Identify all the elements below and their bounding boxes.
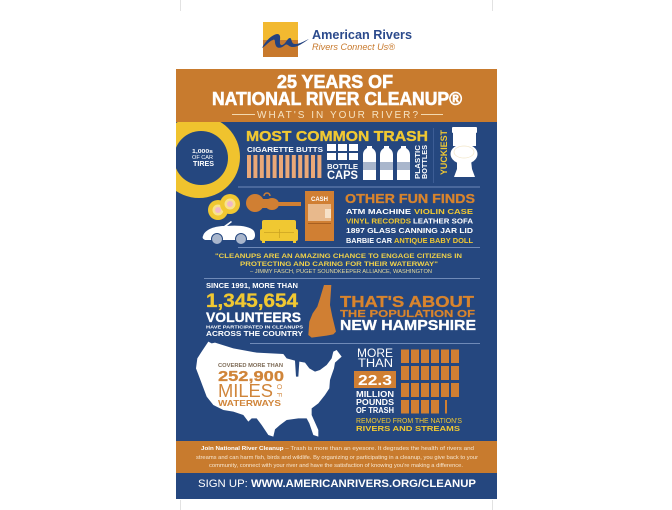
icon: violin case xyxy=(246,193,301,212)
comparison: New Hampshire: NEW HAMPSHIRE xyxy=(340,318,476,334)
logo: American Rivers xyxy=(262,22,412,57)
volunteers statistic: HAVE PARTICIPATED IN CLEANUPS xyxy=(206,324,303,330)
icon: toilet xyxy=(450,127,478,177)
volunteers statistic: ACROSS THE COUNTRY xyxy=(206,329,303,338)
label: plastic bottles xyxy=(415,145,429,179)
quote xyxy=(215,253,462,275)
volunteers statistic: SINCE 1991, MORE THAN xyxy=(206,281,298,290)
logo: American Rivers: Rivers Connect Us® xyxy=(312,42,395,53)
waterways statistic: WATERWAYS xyxy=(218,398,281,408)
icon: barbie car xyxy=(203,221,255,244)
subtitle: WHAT'S IN YOUR RIVER? xyxy=(257,110,418,121)
title: 25 YEARS OF xyxy=(277,72,393,92)
label: bottle caps xyxy=(327,162,358,182)
caption: removed from rivers: REMOVED FROM THE NATION'S xyxy=(356,418,462,425)
volunteers statistic: VOLUNTEERS xyxy=(206,310,301,325)
logo: American Rivers: American Rivers xyxy=(312,27,412,42)
label: bottle caps: BOTTLE xyxy=(327,162,358,171)
trash statistic: MORE xyxy=(357,348,393,360)
panel: join call to action: streams and can harm fish, birds and wildlife. By organizing or participating in a cleanup, you give back to your xyxy=(196,455,478,461)
label: plastic bottles: PLASTIC xyxy=(415,145,422,179)
icon: bottle caps xyxy=(327,144,358,160)
panel: sign up: SIGN UP: WWW.AMERICANRIVERS.ORG/CLEANUP xyxy=(198,478,476,490)
icon: ATM machine: CASH xyxy=(311,197,328,203)
title: NATIONAL RIVER CLEANUP® xyxy=(212,89,462,109)
heading: other fun finds: OTHER FUN FINDS xyxy=(345,191,475,206)
waterways statistic: COVERED MORE THAN xyxy=(218,363,283,369)
icon: New Hampshire map xyxy=(308,285,336,338)
list: fun finds: 1897 GLASS CANNING JAR LID xyxy=(346,226,474,235)
trash statistic xyxy=(354,348,396,415)
quote: PROTECTING AND CARING FOR THEIR WATERWAY" xyxy=(240,261,438,268)
tires statistic: OF CAR xyxy=(192,155,213,161)
tires statistic xyxy=(176,122,240,198)
icon: plastic bottles xyxy=(363,146,410,180)
list: fun finds xyxy=(346,207,474,245)
trash statistic: 22.3 xyxy=(358,372,392,389)
label: cigarette butts: CIGARETTE BUTTS xyxy=(247,145,323,154)
tires statistic: TIRES xyxy=(193,161,214,168)
list: fun finds: ANTIQUE BABY DOLL xyxy=(394,236,473,245)
label: plastic bottles: BOTTLES xyxy=(422,145,429,179)
list: fun finds: BARBIE CAR xyxy=(346,236,393,245)
trash statistic: MILLION xyxy=(356,390,394,399)
list: fun finds: ATM MACHINE xyxy=(346,207,411,216)
panel: main blue body xyxy=(176,122,497,441)
comparison: New Hampshire: THAT'S ABOUT xyxy=(340,294,475,311)
waterways statistic: OF xyxy=(275,384,282,397)
comparison: New Hampshire xyxy=(340,294,476,334)
list: fun finds: VIOLIN CASE xyxy=(414,207,473,216)
panel: join call to action xyxy=(176,441,497,473)
list: fun finds: VINYL RECORDS xyxy=(346,216,411,226)
chart: trash bags pictogram xyxy=(401,350,459,414)
trash statistic: OF TRASH xyxy=(356,406,394,415)
caption: removed from rivers xyxy=(356,418,462,433)
panel: join call to action: community, connect with your river and have the satisfaction of knowing you're making a difference. xyxy=(209,463,463,469)
icon: leather sofa xyxy=(260,220,298,243)
icon: ATM machine xyxy=(305,191,334,241)
panel: header xyxy=(176,69,497,122)
trash statistic: POUNDS xyxy=(356,398,395,407)
trash statistic: THAN xyxy=(358,358,393,370)
waterways statistic: MILES xyxy=(218,381,273,401)
list: fun finds: LEATHER SOFA xyxy=(413,216,474,226)
comparison: New Hampshire: THE POPULATION OF xyxy=(340,308,476,320)
map: United States xyxy=(196,342,342,437)
volunteers statistic: 1,345,654 xyxy=(206,291,298,312)
quote: – JIMMY FASCH, PUGET SOUNDKEEPER ALLIANCE, WASHINGTON xyxy=(250,269,432,275)
tires statistic: 1,000s xyxy=(192,149,213,155)
panel: join call to action: Join National River Cleanup – Trash is more than an eyesore. It degrades the health of rivers and xyxy=(201,446,474,452)
icon: cigarette butts xyxy=(247,155,321,178)
title xyxy=(212,72,462,109)
quote: "CLEANUPS ARE AN AMAZING CHANCE TO ENGAGE CITIZENS IN xyxy=(215,253,462,260)
waterways statistic: 252,900 xyxy=(218,368,284,385)
label: bottle caps: CAPS xyxy=(327,168,358,182)
waterways statistic xyxy=(218,363,284,408)
label: yuckiest: YUCKIEST xyxy=(439,130,450,175)
volunteers statistic xyxy=(206,281,303,338)
panel: sign up xyxy=(176,473,497,499)
heading: most common trash: MOST COMMON TRASH xyxy=(246,128,428,145)
icon: vinyl records xyxy=(208,194,240,220)
caption: removed from rivers: RIVERS AND STREAMS xyxy=(356,426,460,433)
